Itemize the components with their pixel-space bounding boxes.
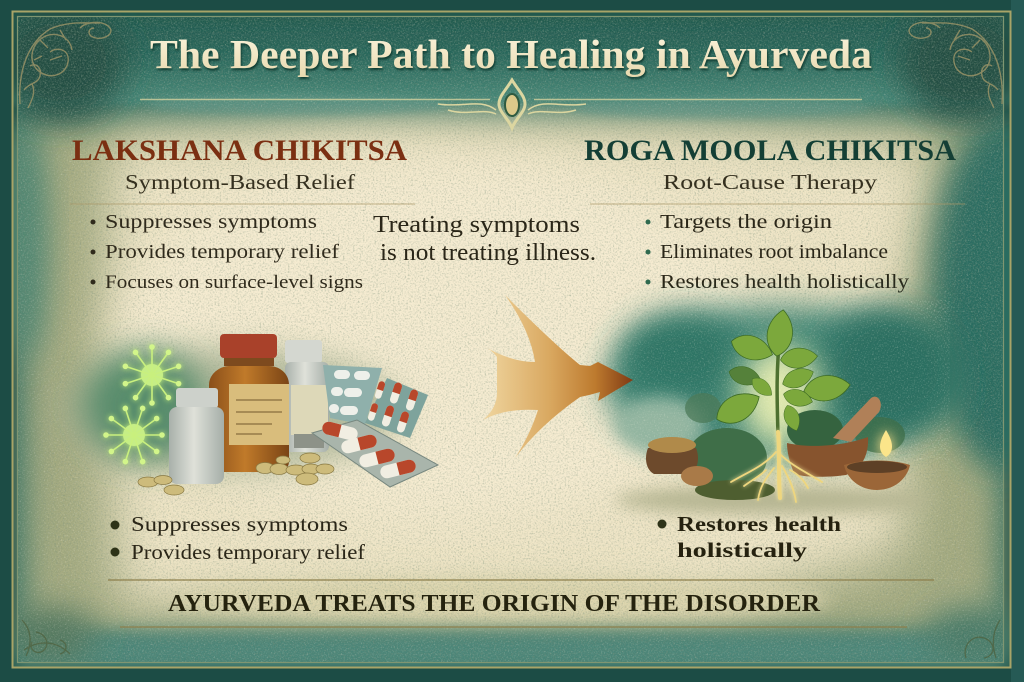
corner ornament: top right: [909, 22, 1002, 108]
white bottle: front: [169, 388, 224, 484]
caption: roga moola: holistically: [677, 538, 808, 562]
panel: lakshana chikitsa: [72, 134, 407, 293]
corner ornament: bottom right: [965, 620, 1000, 658]
caption: lakshana: Provides temporary relief: [131, 540, 365, 564]
corner ornament: bottom left: [22, 620, 70, 656]
central message: Treating symptoms: [373, 212, 580, 238]
heading: lakshana: LAKSHANA CHIKITSA: [72, 134, 407, 167]
stem: [777, 335, 780, 435]
blister pack: front: [312, 420, 438, 487]
amber bottle: [209, 334, 289, 472]
leaves: [711, 308, 852, 433]
bullet list: roga moola: Eliminates root imbalance: [660, 241, 888, 263]
title: The Deeper Path to Healing in Ayurveda: [150, 31, 872, 77]
bullet list: lakshana: Suppresses symptoms: [105, 211, 317, 233]
icon: healing plant with roots: [646, 308, 910, 502]
corner ornament: top left: [20, 22, 111, 108]
mortar and pestle: [787, 397, 881, 477]
icon: medicine bottles and pills: [138, 334, 438, 495]
bullet list: lakshana: [90, 211, 363, 293]
pot and log: [646, 437, 713, 486]
footer statement: AYURVEDA TREATS THE ORIGIN OF THE DISORDER: [168, 591, 821, 617]
teal haze: plant: [605, 305, 960, 514]
loose pills: [138, 453, 334, 495]
blister pack: red capsules: [365, 378, 428, 438]
herbs: [685, 393, 905, 500]
title ornament: [140, 80, 862, 128]
bullet list: roga moola: Targets the origin: [660, 211, 832, 233]
arrow: from symptoms to root cause: [482, 295, 633, 458]
bullet list: roga moola: Restores health holistically: [660, 271, 909, 293]
offering bowl and flame: [844, 430, 910, 490]
caption: roga moola: Restores health: [677, 512, 841, 536]
panel: roga moola chikitsa: [584, 134, 956, 293]
central message: [373, 212, 596, 266]
central message: is not treating illness.: [380, 240, 596, 266]
white bottle: back: [285, 340, 329, 452]
bullet list: roga moola: [646, 211, 909, 293]
heading: roga moola: ROGA MOOLA CHIKITSA: [584, 134, 956, 167]
green haze: medicine: [60, 348, 400, 472]
bullet list: lakshana: Focuses on surface-level signs: [105, 272, 363, 293]
caption: lakshana: Suppresses symptoms: [131, 512, 348, 536]
divider lines: [70, 203, 965, 205]
caption: lakshana: [110, 512, 365, 564]
caption: roga moola: [658, 512, 841, 562]
icon: virus cells: [103, 344, 182, 465]
blister pack: teal: [323, 365, 382, 425]
subheading: symptom-based relief: Symptom-Based Relief: [125, 170, 355, 194]
roots: [731, 432, 822, 502]
bullet list: lakshana: Provides temporary relief: [105, 241, 339, 263]
subheading: root-cause therapy: Root-Cause Therapy: [663, 170, 878, 194]
footer rules: [108, 580, 934, 627]
